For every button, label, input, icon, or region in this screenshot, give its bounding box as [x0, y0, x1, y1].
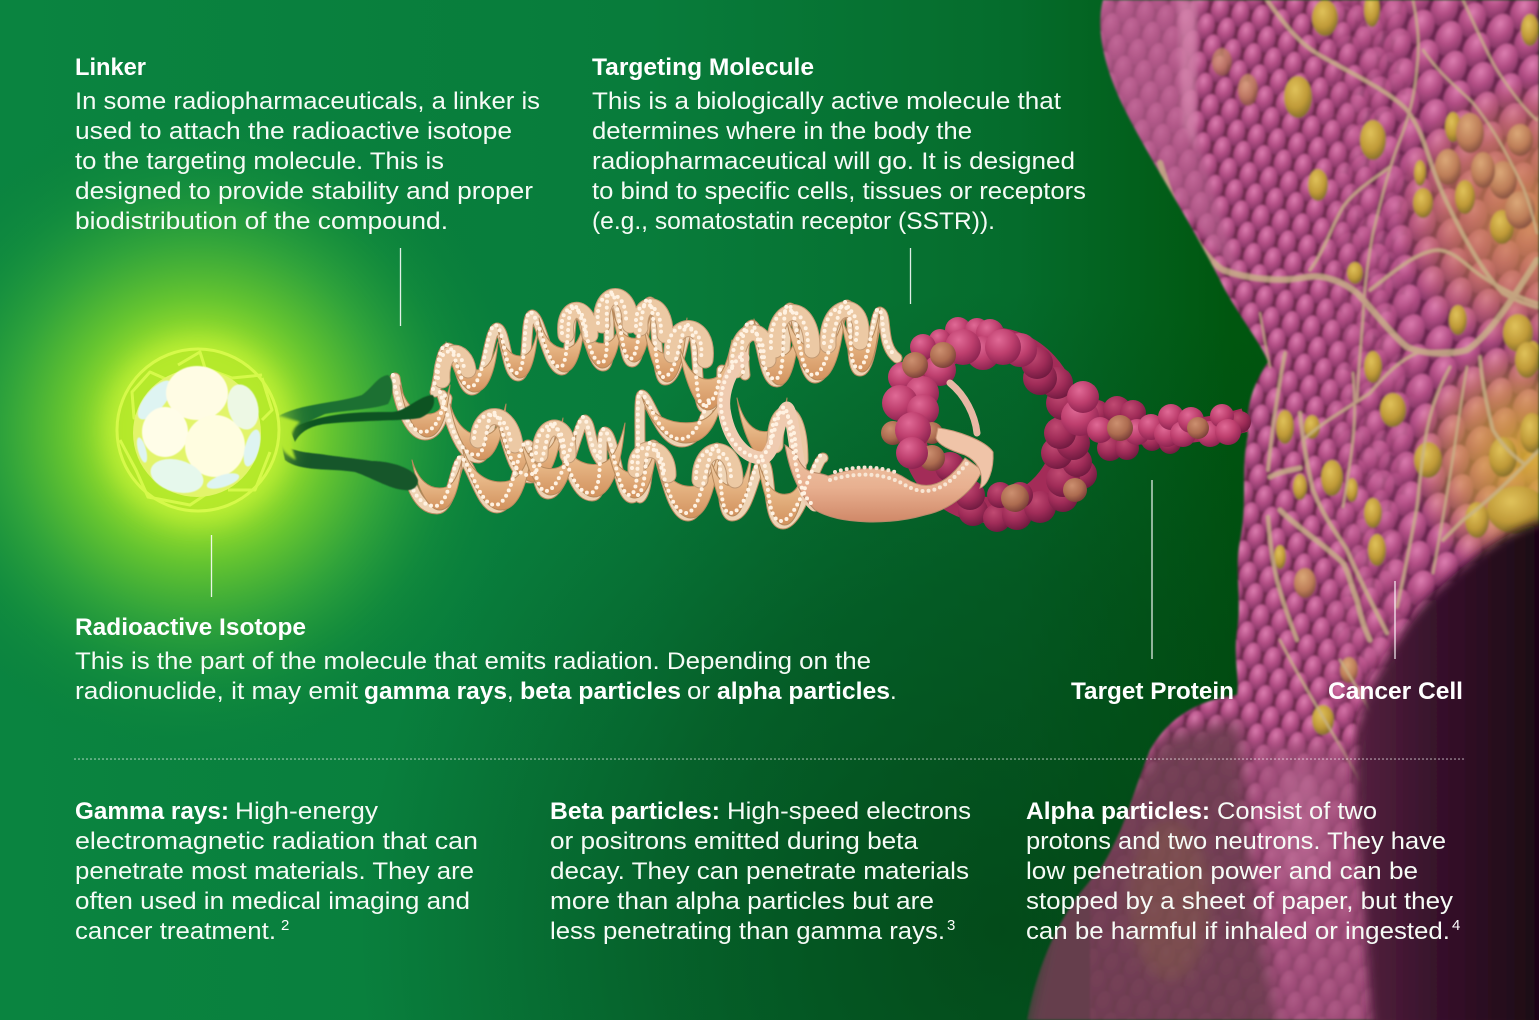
- icon: core panels: [132, 366, 264, 498]
- text block: gamma rays: penetrate most materials. They are: [75, 858, 474, 885]
- text block: alpha particles: can be harmful if inhaled or ingested.: [1026, 918, 1450, 945]
- text block: alpha particles: protons and two neutrons. They have: [1026, 828, 1446, 855]
- text block: linker: Linker: [75, 54, 146, 81]
- coil wide peaks outline: [442, 296, 861, 480]
- text block: beta particles: 3: [947, 917, 955, 934]
- text block: beta particles: [550, 798, 971, 945]
- text block: radioactive isotope: .: [890, 678, 897, 705]
- text block: radioactive isotope: beta particles: [520, 678, 681, 705]
- text block: radioactive isotope: or: [687, 678, 710, 705]
- ring beads top and left: [882, 317, 1099, 436]
- text block: radioactive isotope: alpha particles: [717, 678, 890, 705]
- icon: isotope glow: [106, 339, 290, 523]
- text block: gamma rays: High-energy: [235, 798, 378, 825]
- icon: yellow and orange cell beads: [1212, 0, 1539, 735]
- text block: radioactive isotope: gamma rays: [364, 678, 507, 705]
- text block: alpha particles: Alpha particles:: [1026, 798, 1210, 825]
- icon: glowing core: [133, 369, 261, 497]
- text block: radioactive isotope: [75, 614, 897, 705]
- text block: linker: [75, 54, 540, 235]
- illustration: target protein ring and tail: [881, 317, 1251, 532]
- text block: targeting molecule: [592, 54, 1086, 235]
- text block: alpha particles: 4: [1452, 917, 1460, 934]
- text block: radioactive isotope: ,: [507, 678, 514, 705]
- text block: alpha particles: Consist of two: [1217, 798, 1377, 825]
- ribbon bead rows: [830, 462, 968, 491]
- label: target protein: Target Protein: [1071, 678, 1234, 705]
- text block: targeting molecule: radiopharmaceutical will go. It is designed: [592, 148, 1075, 175]
- text block: beta particles: decay. They can penetrate materials: [550, 858, 969, 885]
- text block: beta particles: Beta particles:: [550, 798, 720, 825]
- text block: linker: In some radiopharmaceuticals, a linker is: [75, 88, 540, 115]
- text block: linker: designed to provide stability and proper: [75, 178, 533, 205]
- icon: outer cage: [117, 349, 279, 511]
- coil pale strand: [395, 295, 897, 524]
- illustration: cancer cell: [1020, 0, 1539, 1020]
- text block: alpha particles: [1026, 798, 1460, 945]
- coil strand outline layer: [395, 295, 897, 524]
- coil thin loop through ring: [950, 383, 977, 433]
- illustration: dark cell overlap in lower right: [1355, 522, 1539, 1020]
- text block: gamma rays: electromagnetic radiation that can: [75, 828, 478, 855]
- coil wide peaks: [442, 296, 861, 480]
- text block: targeting molecule: to bind to specific cells, tissues or receptors: [592, 178, 1086, 205]
- text block: radioactive isotope: radionuclide, it may emit: [75, 678, 358, 705]
- text block: beta particles: High-speed electrons: [727, 798, 971, 825]
- pale blurred upper left of cell: [1095, 0, 1240, 280]
- text block: beta particles: less penetrating than gamma rays.: [550, 918, 945, 945]
- text block: alpha particles: low penetration power and can be: [1026, 858, 1418, 885]
- text block: alpha particles: stopped by a sheet of paper, but they: [1026, 888, 1453, 915]
- text block: radioactive isotope: Radioactive Isotope: [75, 614, 306, 641]
- text block: targeting molecule: Targeting Molecule: [592, 54, 814, 81]
- illustration: linker stems: [275, 375, 434, 490]
- illustration: targeting molecule coils: [395, 295, 897, 525]
- text block: gamma rays: often used in medical imaging and: [75, 888, 470, 915]
- icon: cell surface fibres: [1160, 0, 1539, 780]
- text block: targeting molecule: (e.g., somatostatin receptor (SSTR)).: [592, 208, 995, 235]
- text block: linker: used to attach the radioactive isotope: [75, 118, 512, 145]
- coil bead highlights: [393, 292, 895, 521]
- callout lines: [212, 248, 1395, 659]
- text block: gamma rays: [75, 798, 478, 945]
- text block: beta particles: or positrons emitted during beta: [550, 828, 919, 855]
- text block: beta particles: more than alpha particles but are: [550, 888, 934, 915]
- ribbon hoop: [936, 428, 993, 488]
- text block: radioactive isotope: This is the part of the molecule that emits radiation. Depending on the: [75, 648, 871, 675]
- blurred lower lobe of cell: [1020, 720, 1400, 1020]
- illustration: large coil ribbon around ring: [724, 358, 993, 522]
- ring base: [912, 340, 1068, 510]
- text block: gamma rays: Gamma rays:: [75, 798, 229, 825]
- ribbon strand: [724, 358, 815, 505]
- text block: targeting molecule: determines where in the body the: [592, 118, 972, 145]
- text block: gamma rays: 2: [281, 917, 289, 934]
- illustration: radioactive isotope: [106, 339, 290, 523]
- label: cancer cell: Cancer Cell: [1328, 678, 1463, 705]
- text block: linker: to the targeting molecule. This is: [75, 148, 444, 175]
- coil trough ribbons: [400, 308, 880, 525]
- wide bottom ribbon: [785, 445, 982, 522]
- tail base: [1090, 420, 1245, 433]
- text block: linker: biodistribution of the compound.: [75, 208, 448, 235]
- ring beads bottom and right: [935, 347, 1251, 532]
- text block: gamma rays: cancer treatment.: [75, 918, 276, 945]
- dotted rule: [75, 758, 1465, 760]
- text block: targeting molecule: This is a biologically active molecule that: [592, 88, 1061, 115]
